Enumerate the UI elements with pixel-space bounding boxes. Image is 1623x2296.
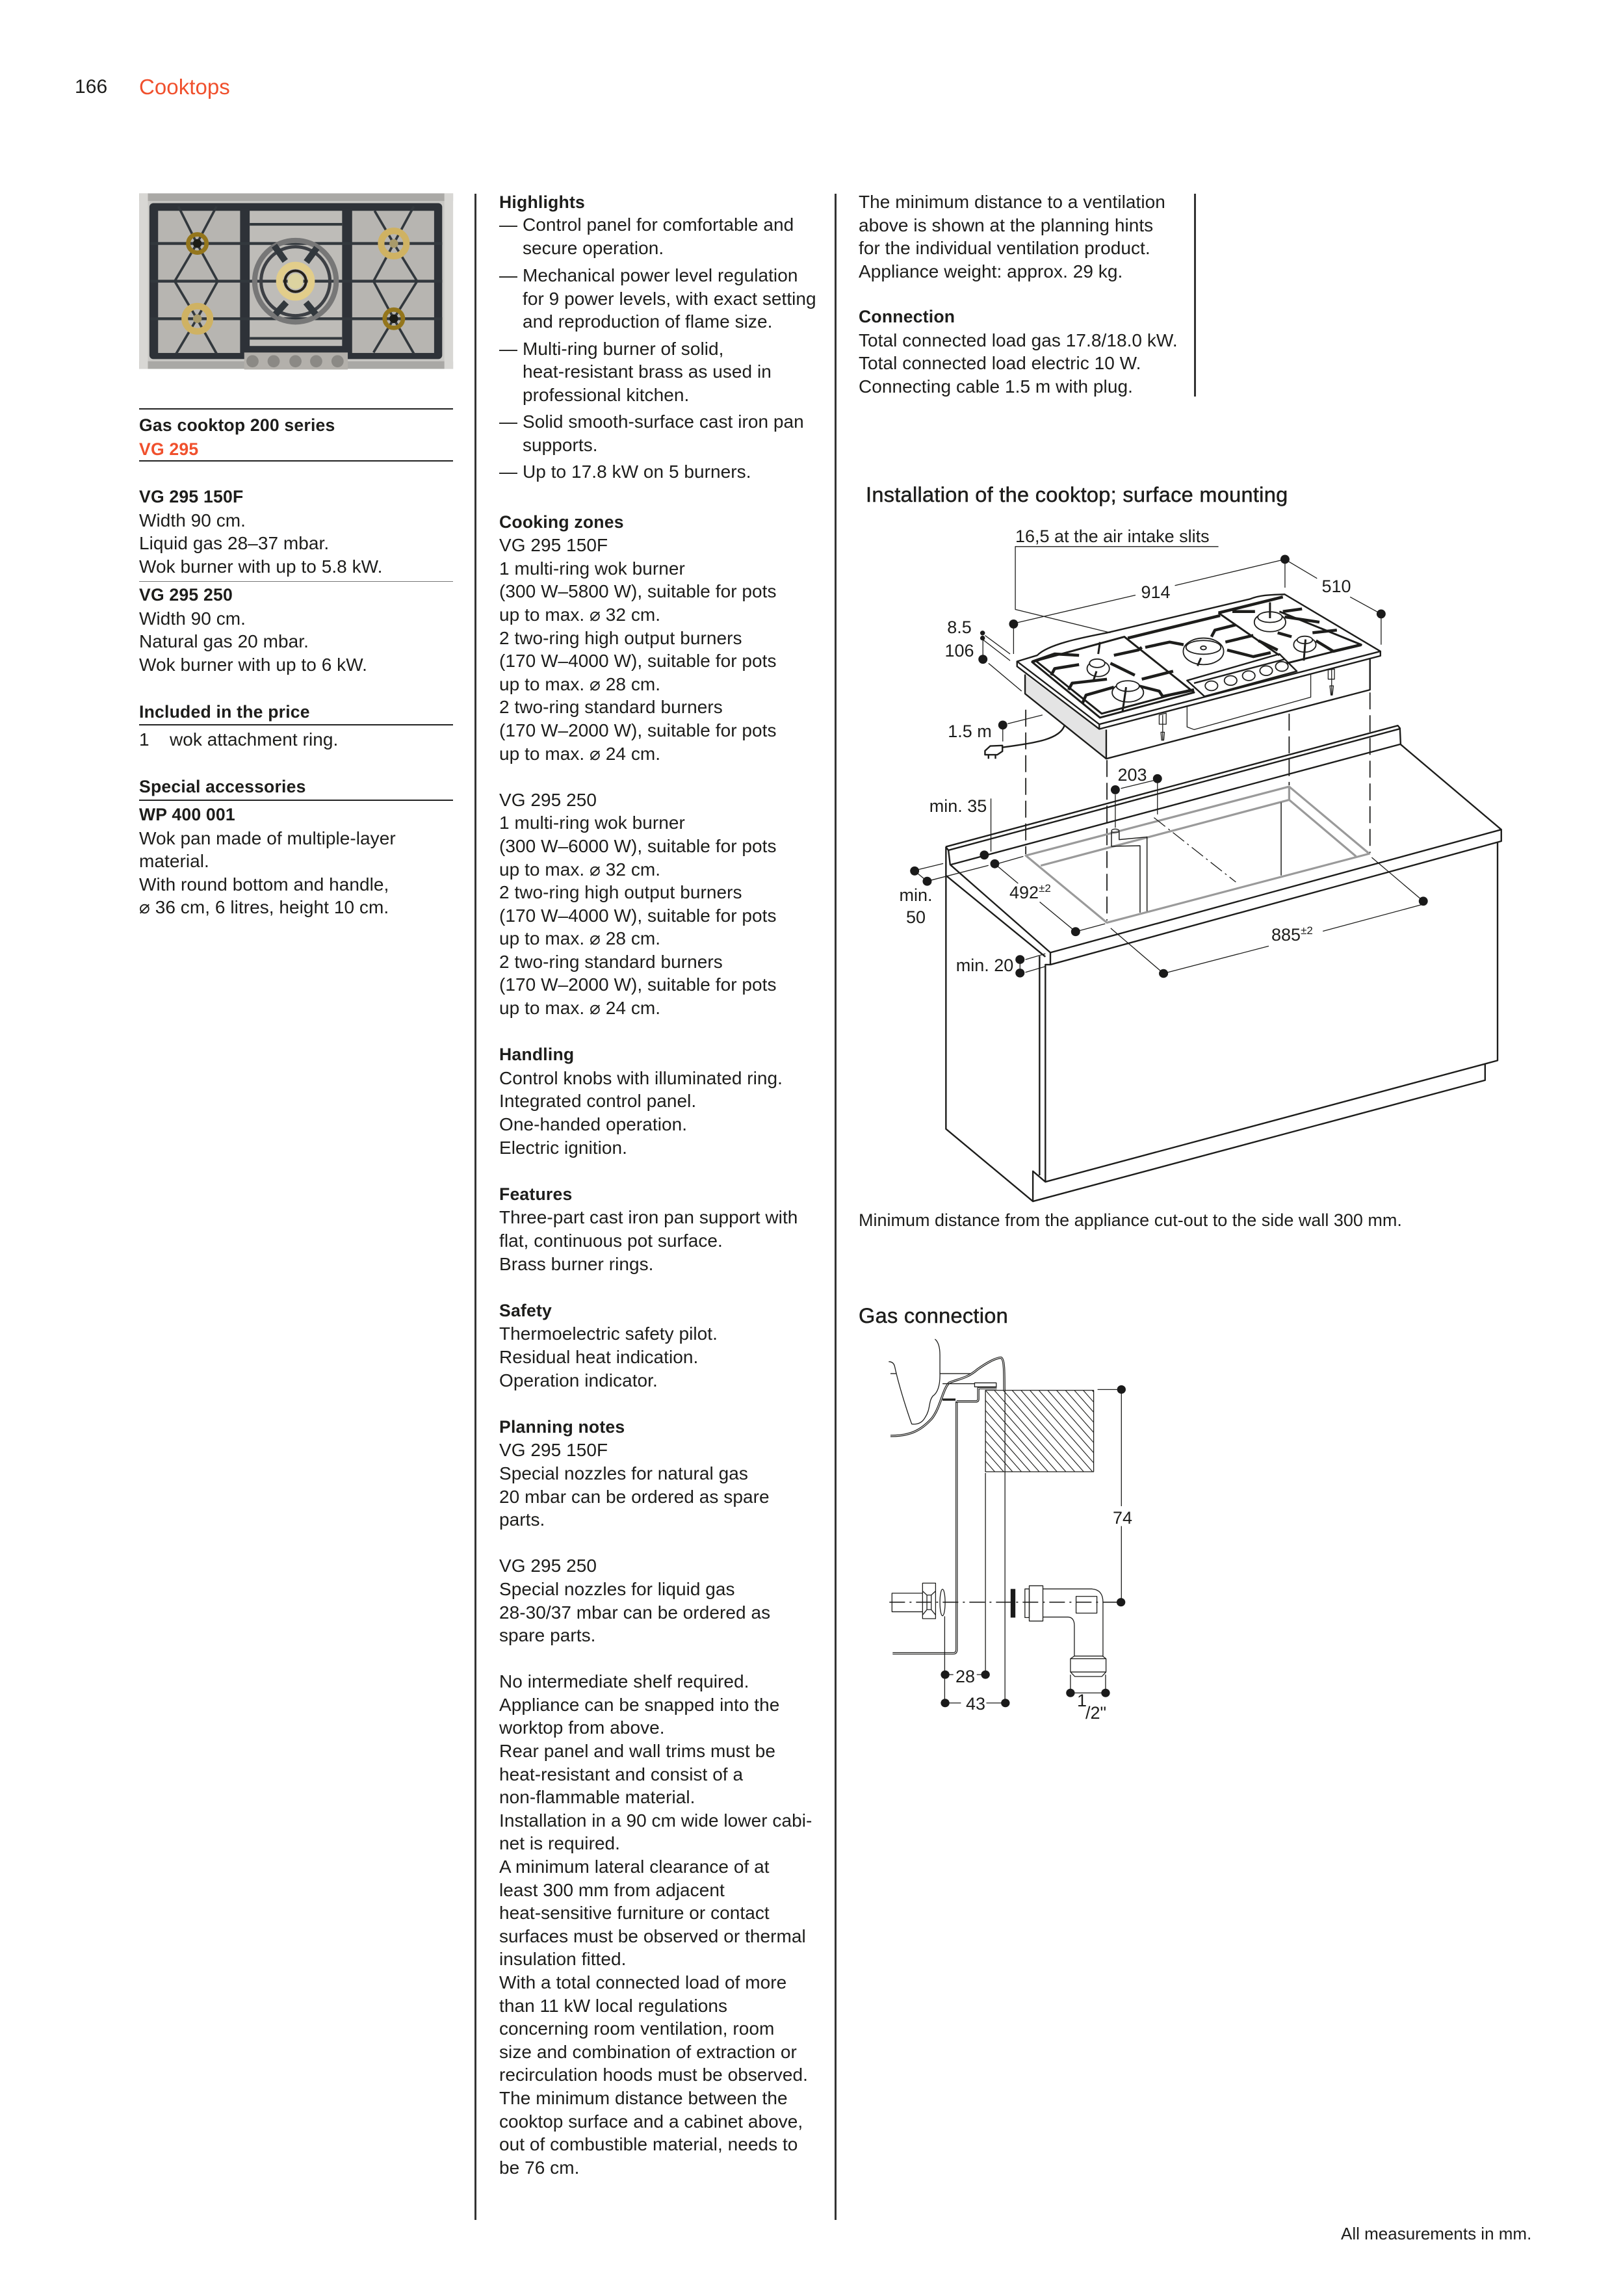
diagram labels: min. 35 [929,796,987,816]
gas diagram labels [955,1508,1132,1723]
variant VG 295 150F: VG 295 150F Width 90 cm. Liquid gas 28–37 mbar. Wok burner with up to 5.8 kW. [139,487,382,577]
highlights list: Solid smooth-surface cast iron pan supports. [523,411,804,455]
footnote: All measurements in mm. [1341,2224,1531,2243]
diagram labels: ±2 [1039,882,1051,894]
hob and worktop line art [910,547,1428,936]
gas connection diagram [889,1339,1132,1719]
diagram labels: 492 [1009,883,1039,902]
series heading: Gas cooktop 200 series VG 295 [139,415,335,459]
diagram labels: ±2 [1301,924,1313,937]
highlights list: Multi-ring burner of solid, heat-resistant brass as used in professional kitchen. [523,338,772,405]
rule [139,460,453,462]
column divider [1194,194,1196,397]
heading: gas connection: Gas connection [859,1304,1008,1327]
rule [139,800,453,801]
rule [139,408,453,410]
diagram labels: 203 [1117,765,1147,785]
gas diagram labels: 74 [1113,1508,1132,1528]
diagram labels: min. 20 [956,956,1013,975]
highlights list: — [499,215,517,235]
gas diagram labels: /2" [1085,1703,1106,1723]
included item: 1 wok attachment ring. [139,729,338,750]
hatched worktop section [985,1390,1093,1472]
section title: Cooktops [139,75,230,99]
highlights list: — [499,411,517,432]
caption: Minimum distance from the appliance cut-out to the side wall 300 mm. [859,1210,1402,1230]
diagram labels: 106 [944,641,974,660]
rule [139,581,453,582]
diagram labels: 914 [1141,582,1171,602]
variant VG 295 250: VG 295 250 Width 90 cm. Natural gas 20 mbar. Wok burner with up to 6 kW. [139,585,367,675]
diagram labels: 8.5 [947,618,972,637]
diagram labels: 50 [906,907,926,927]
diagram labels: 16,5 at the air intake slits [1015,527,1210,546]
highlights list: Up to 17.8 kW on 5 burners. [523,462,751,482]
diagram labels: min. [899,885,933,905]
diagram labels [899,527,1351,975]
highlights list: Mechanical power level regulation for 9 power levels, with exact setting and reproduction of flame size. [523,265,816,332]
gas diagram labels: 28 [955,1667,975,1686]
page number: 166 [75,76,107,98]
included heading: Included in the price [139,702,310,722]
accessories heading: Special accessories [139,777,306,796]
accessory WP 400 001: WP 400 001 Wok pan made of multiple-layer material. With round bottom and handle, ⌀ 36 cm, 6 litres, height 10 cm. [139,805,396,917]
rule [139,724,453,725]
gas fittings line art [889,1339,1126,1707]
highlights list: — [499,265,517,285]
ventilation note: The minimum distance to a ventilation above is shown at the planning hints for the individual ventilation product. Appliance weight: approx. 29 kg. [859,192,1165,281]
highlights list [499,215,816,482]
highlights list: — [499,462,517,482]
cabinet line art [946,744,1501,1201]
diagram labels: 1.5 m [948,722,992,741]
diagram labels: 510 [1321,577,1351,596]
column divider [835,194,836,2220]
highlights heading: Highlights [499,192,585,212]
heading: installation: Installation of the cooktop; surface mounting [866,483,1288,506]
cooking zones and specification text: Cooking zones VG 295 150F 1 multi-ring wok burner (300 W–5800 W), suitable for pots up to max. ⌀ 32 cm. 2 two-ring high output burners (170 W–4000 W), suitable for pots up to max. ⌀ 28 cm. 2 two-ring standard burners (170 W–2000 W), suitable for pots up to max. ⌀ 24 cm. VG 295 250 1 multi-ring wok burner (300 W–6000 W), suitable for pots up to max. ⌀ 32 cm. 2 two-ring high output burners (170 W–4000 W), suitable for pots up to max. ⌀ 28 cm. 2 two-ring standard burners (170 W–2000 W), suitable for pots up to max. ⌀ 24 cm. Handling Control knobs with illuminated ring. Integrated control panel. One-handed operation. Electric ignition. Features Three-part cast iron pan support with flat, continuous pot surface. Brass burner rings. Safety Thermoelectric safety pilot. Residual heat indication. Operation indicator. Planning notes VG 295 150F Special nozzles for natural gas 20 mbar can be ordered as spare parts. VG 295 250 Special nozzles for liquid gas 28-30/37 mbar can be ordered as spare parts. No intermediate shelf required. Appliance can be snapped into the worktop from above. Rear panel and wall trims must be heat-resistant and consist of a non-flammable material. Installation in a 90 cm wide lower cabi- net is required. A minimum lateral clearance of at least 300 mm from adjacent heat-sensitive furniture or contact surfaces must be observed or thermal insulation fitted. With a total connected load of more than 11 kW local regulations concerning room ventilation, room size and combination of extraction or recirculation hoods must be observed. The minimum distance between the cooktop surface and a cabinet above, out of combustible material, needs to be 76 cm. [499,512,812,2178]
highlights list: Control panel for comfortable and secure operation. [523,215,794,258]
gas diagram labels: 1 [1077,1691,1087,1710]
column divider [474,194,476,2220]
connection details: Connection Total connected load gas 17.8/18.0 kW. Total connected load electric 10 W. Connecting cable 1.5 m with plug. [859,307,1178,397]
highlights list: — [499,338,517,359]
gas diagram labels: 43 [966,1694,985,1714]
diagram labels: 885 [1271,925,1301,945]
